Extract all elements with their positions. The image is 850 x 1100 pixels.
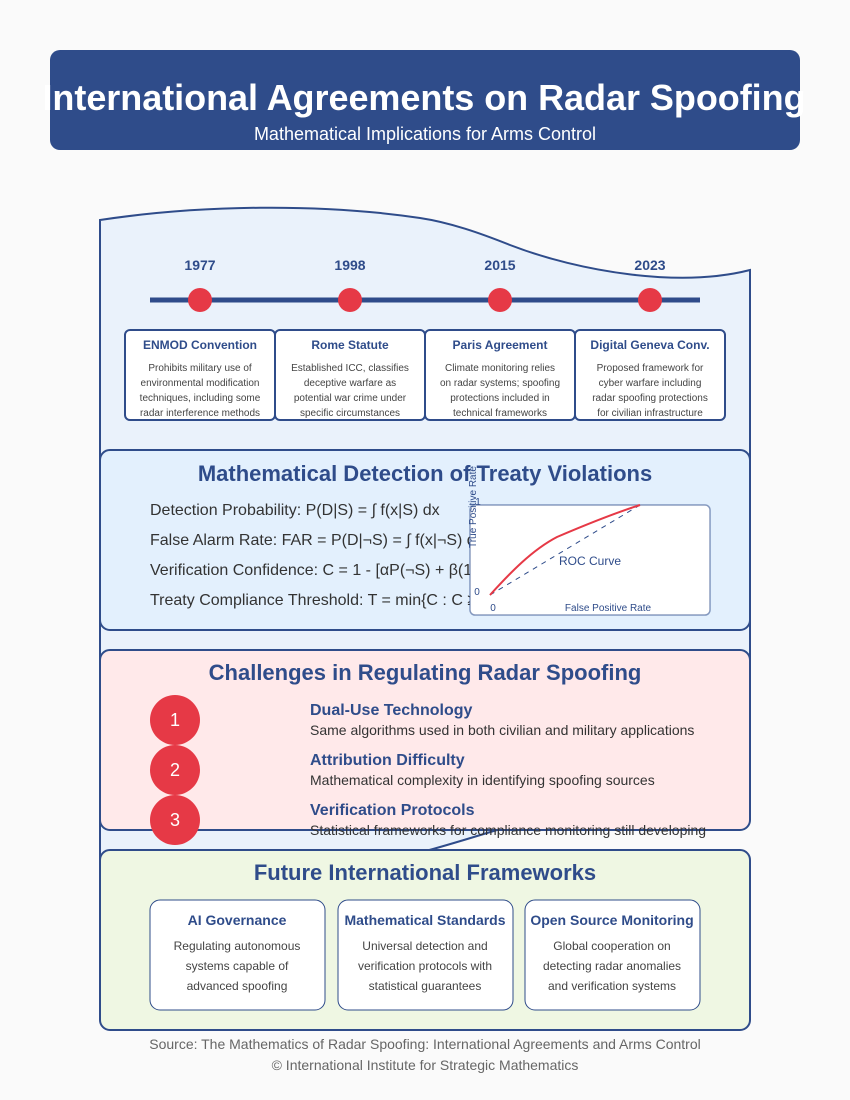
heading: Future International Frameworks [254, 860, 596, 885]
chart: ROC curve: 1 [475, 497, 481, 508]
challenge 1: Same algorithms used in both civilian and military applications [310, 722, 694, 738]
milestone 1977: radar interference methods [140, 408, 260, 419]
milestone 1998: specific circumstances [300, 408, 400, 419]
milestone 1998: Established ICC, classifies [291, 363, 409, 374]
milestone 1998 [275, 257, 425, 420]
source footer: Source: The Mathematics of Radar Spoofing: International Agreements and Arms Control [149, 1036, 701, 1052]
card: open source monitoring: detecting radar anomalies [543, 959, 681, 973]
milestone 1977: Prohibits military use of [148, 363, 252, 374]
card: AI governance: systems capable of [186, 959, 289, 973]
subtitle: Mathematical Implications for Arms Control [254, 124, 596, 144]
milestone 1977: techniques, including some [140, 393, 261, 404]
milestone 2023: for civilian infrastructure [597, 408, 703, 419]
card: AI governance: advanced spoofing [187, 979, 287, 993]
formulas: False Alarm Rate: FAR = P(D|¬S) = ∫ f(x|¬S) dx [150, 532, 484, 549]
milestone 2023: radar spoofing protections [592, 393, 708, 404]
card: mathematical standards [338, 900, 513, 1010]
chart: ROC curve: True Positive Rate [468, 466, 479, 548]
challenge 3 [150, 795, 706, 845]
formulas [150, 502, 535, 609]
challenge 1 [150, 695, 694, 745]
formulas: Treaty Compliance Threshold: T = min{C : C ≥ 0.95} [150, 592, 518, 609]
timeline axis [150, 298, 700, 302]
challenge 1: Dual-Use Technology [310, 702, 472, 719]
challenge 2: 2 [170, 760, 180, 780]
source footer [149, 1036, 701, 1073]
panel: challenges [100, 650, 750, 845]
challenge 2 [150, 745, 655, 795]
milestone 2015: Paris Agreement [453, 338, 547, 352]
milestone 2023 [575, 257, 725, 420]
card: open source monitoring: Global cooperation on [553, 939, 671, 953]
milestone 1977: 1977 [184, 257, 216, 273]
card: mathematical standards: Mathematical Standards [344, 912, 506, 928]
wavy background panel [100, 208, 750, 885]
milestone 2023: cyber warfare including [599, 378, 701, 389]
card: open source monitoring: and verification systems [548, 979, 676, 993]
heading: Mathematical Detection of Treaty Violations [198, 461, 652, 486]
chart: ROC curve: 0 [474, 587, 480, 598]
milestone 2015: protections included in [450, 393, 550, 404]
card: AI governance: AI Governance [188, 912, 287, 928]
milestone 2023: Digital Geneva Conv. [590, 338, 710, 352]
chart: ROC curve: False Positive Rate [565, 603, 652, 614]
card: open source monitoring [525, 900, 700, 1010]
milestone 2015: 2015 [484, 257, 516, 273]
card: mathematical standards: verification protocols with [358, 959, 492, 973]
card: AI governance [150, 900, 325, 1010]
formulas: Verification Confidence: C = 1 - [αP(¬S) + β(1-P(D|S))] [150, 562, 535, 579]
formulas: Detection Probability: P(D|S) = ∫ f(x|S) dx [150, 502, 440, 519]
challenge 3: Verification Protocols [310, 802, 475, 819]
milestone 1998: deceptive warfare as [304, 378, 396, 389]
milestone 2023: 2023 [634, 257, 666, 273]
panel: mathematical detection [100, 450, 750, 630]
milestone 1977 [125, 257, 275, 420]
card: mathematical standards: statistical guarantees [369, 979, 481, 993]
title: International Agreements on Radar Spoofing [42, 77, 806, 118]
header banner [42, 50, 806, 150]
card: mathematical standards: Universal detection and [362, 939, 488, 953]
milestone 2015: on radar systems; spoofing [440, 378, 560, 389]
milestone 2015 [425, 257, 575, 420]
milestone 1998: potential war crime under [294, 393, 407, 404]
milestone 1998: 1998 [334, 257, 366, 273]
challenge 3: Statistical frameworks for compliance monitoring still developing [310, 822, 706, 838]
panel: timeline [125, 257, 725, 420]
challenge 2: Attribution Difficulty [310, 752, 465, 769]
panel: future frameworks [100, 850, 750, 1030]
challenge 3: 3 [170, 810, 180, 830]
card: AI governance: Regulating autonomous [174, 939, 300, 953]
challenge 1: 1 [170, 710, 180, 730]
milestone 2015: Climate monitoring relies [445, 363, 555, 374]
chart: ROC curve: ROC Curve [559, 554, 621, 568]
challenge 2: Mathematical complexity in identifying spoofing sources [310, 772, 655, 788]
milestone 1998: Rome Statute [311, 338, 389, 352]
card: open source monitoring: Open Source Monitoring [530, 912, 694, 928]
chart: ROC curve [468, 466, 710, 615]
milestone 1977: ENMOD Convention [143, 338, 257, 352]
milestone 1977: environmental modification [141, 378, 259, 389]
heading: Challenges in Regulating Radar Spoofing [209, 660, 641, 685]
source footer: © International Institute for Strategic Mathematics [272, 1057, 578, 1073]
chart: ROC curve: 0 [490, 603, 496, 614]
milestone 2023: Proposed framework for [597, 363, 704, 374]
milestone 2015: technical frameworks [453, 408, 547, 419]
